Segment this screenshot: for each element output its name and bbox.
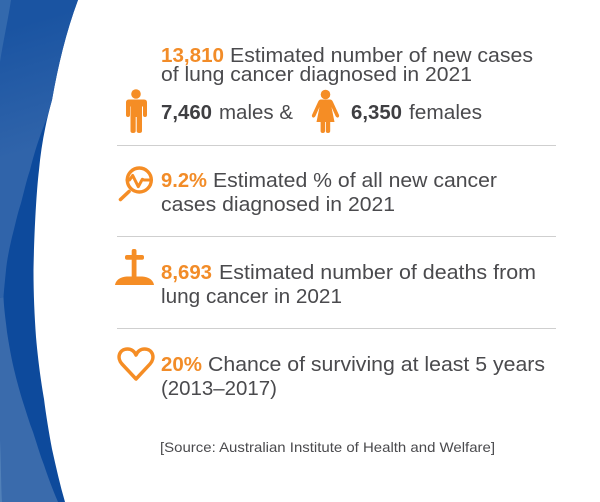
block: new cases: females [409,101,482,124]
block: survival: (2013–2017) [161,377,277,400]
block: new cases [126,44,533,133]
text: males: 7,460 [161,101,212,124]
text: females: 6,350 [351,101,402,124]
block: new cases: of lung cancer diagnosed in 2021 [161,63,472,86]
headline: new cases: 13,810 [161,44,224,67]
icon: female [312,90,339,133]
icon: heart outline [119,349,153,379]
icon: grave with cross [115,249,154,285]
block: percent of cases [120,168,497,216]
block: percent of cases: Estimated % of all new cancer [213,169,497,192]
text: percent: 9.2% [161,169,207,192]
block: survival [119,349,545,400]
icon: male [126,89,147,133]
block: deaths: lung cancer in 2021 [161,285,342,308]
text: survival: 20% [161,353,202,376]
text: deaths: 8,693 [161,261,212,284]
block: survival: Chance of surviving at least 5 years [208,353,545,376]
block: percent of cases: cases diagnosed in 2021 [161,193,395,216]
block: new cases: males & [219,101,293,124]
block: deaths: Estimated number of deaths from [219,261,536,284]
block: new cases: Estimated number of new cases [230,44,533,67]
background ribbon [0,0,78,502]
block: deaths [115,249,536,308]
icon: magnifier with pulse [120,168,152,200]
source note: [Source: Australian Institute of Health and Welfare] [160,439,495,455]
